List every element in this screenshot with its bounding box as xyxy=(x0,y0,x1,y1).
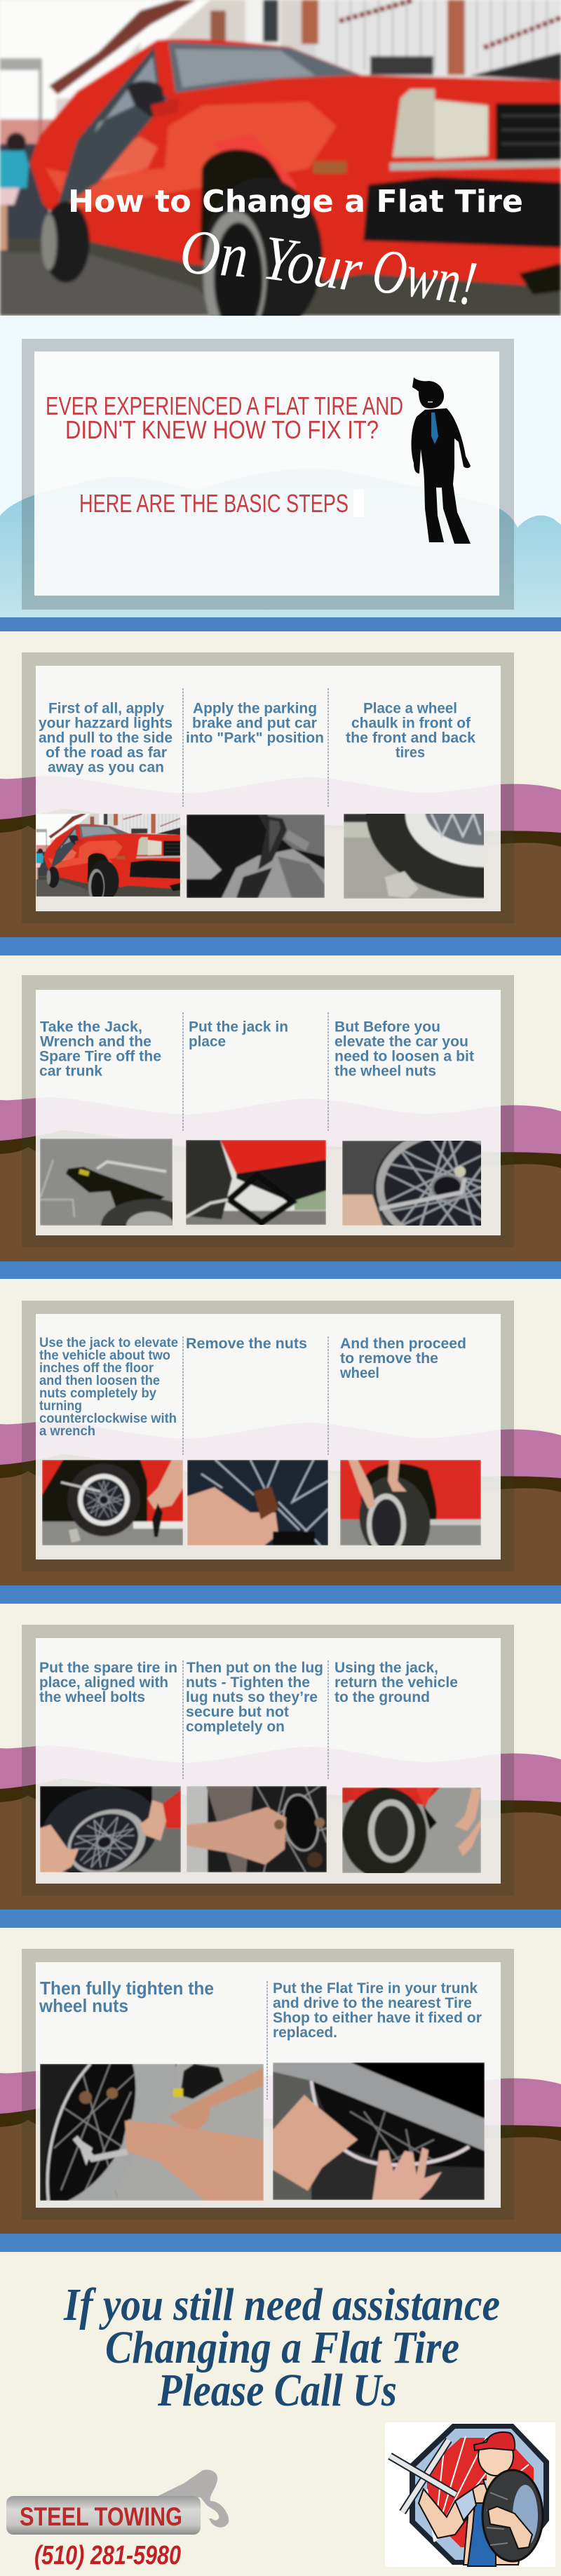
photo: red car xyxy=(36,814,180,897)
landscape hills xyxy=(0,776,561,940)
text: parking brake: brake and put car xyxy=(192,716,317,731)
text: take the jack xyxy=(39,1019,161,1080)
text: return to ground: to the ground xyxy=(334,1689,430,1705)
text: wheel chock: Place a wheel xyxy=(363,700,457,717)
intro steps text: HERE ARE THE BASIC STEPS xyxy=(79,489,349,518)
white card xyxy=(36,666,501,911)
intro panel xyxy=(34,351,499,596)
text: return to ground: Using the jack, xyxy=(334,1660,438,1676)
icon: mechanic with tire and wrench xyxy=(385,2422,555,2567)
call to action text: Changing a Flat Tire xyxy=(105,2322,459,2373)
text: lug nuts: Then put on the lug xyxy=(187,1660,323,1676)
divider band 1 xyxy=(0,617,561,631)
text: remove wheel: to remove the xyxy=(340,1350,438,1367)
text: parking brake: Apply the parking xyxy=(193,700,317,717)
text: fully tighten: Then fully tighten the xyxy=(40,1978,214,1999)
text: elevate vehicle: Use the jack to elevate xyxy=(39,1336,178,1350)
text: remove nuts: Remove the nuts xyxy=(186,1336,307,1352)
photo: lowering the vehicle xyxy=(342,1787,481,1873)
frame xyxy=(22,1625,514,1896)
text: parking brake xyxy=(186,700,324,746)
text: loosen wheel nuts: elevate the car you xyxy=(334,1034,468,1050)
text: lug nuts: nuts - Tighten the xyxy=(186,1675,310,1691)
subtitle: On Your Own! xyxy=(178,217,481,318)
subtitle: On Your Own!: On xyxy=(178,217,250,291)
photo: removing nuts by hand xyxy=(187,1460,328,1545)
intro white marker xyxy=(353,490,364,517)
text: return to ground: return the vehicle xyxy=(334,1675,458,1691)
photo: scissor jack under car xyxy=(186,1140,326,1225)
landscape hills xyxy=(0,1745,561,1910)
text: flat tire to shop: replaced. xyxy=(273,2025,337,2041)
text: loosen wheel nuts xyxy=(334,1019,474,1080)
text: wheel chock: chaulk in front of xyxy=(351,716,471,731)
text: hazard lights: First of all, apply xyxy=(48,700,164,717)
intro question text xyxy=(46,391,403,444)
divider band 2 xyxy=(0,937,561,955)
text: flat tire to shop xyxy=(273,1980,482,2041)
text: put the jack in place xyxy=(189,1019,288,1050)
photo: fitting spare tire xyxy=(40,1786,181,1872)
landscape hills xyxy=(0,1097,561,1261)
text: loosen wheel nuts: the wheel nuts xyxy=(334,1064,436,1080)
white card xyxy=(36,1314,501,1559)
text: hazard lights: away as you can xyxy=(48,759,164,776)
frame xyxy=(22,1301,514,1571)
landscape hills xyxy=(0,1421,561,1585)
text: lug nuts xyxy=(186,1660,323,1735)
white card xyxy=(36,1638,501,1884)
text: spare tire in place: the wheel bolts xyxy=(39,1689,145,1705)
text: hazard lights: your hazzard lights xyxy=(39,716,173,731)
text: take the jack: Wrench and the xyxy=(40,1034,151,1050)
subtitle: On Your Own!: Own! xyxy=(368,236,481,318)
divider band 3 xyxy=(0,1261,561,1279)
text: loosen wheel nuts: But Before you xyxy=(334,1019,440,1035)
photo: loosening wheel nuts xyxy=(342,1141,481,1226)
text: elevate vehicle: counterclockwise with xyxy=(39,1411,177,1426)
photo: car raised on jack xyxy=(42,1460,183,1545)
photo: jack and wrench on ground xyxy=(40,1139,173,1226)
frame xyxy=(22,1949,514,2220)
step panel 1 xyxy=(0,652,561,940)
text: fully tighten: wheel nuts xyxy=(39,1995,128,2016)
call to action text xyxy=(63,2279,500,2416)
text: spare tire in place: Put the spare tire in xyxy=(39,1660,177,1676)
text: spare tire in place xyxy=(39,1660,177,1705)
subtitle: On Your Own!: Your xyxy=(259,223,367,306)
frame xyxy=(22,975,514,1247)
landscape hills xyxy=(0,2070,561,2234)
photo: gear shifter xyxy=(187,814,325,898)
step panel 4 xyxy=(0,1625,561,1910)
text: elevate vehicle: nuts completely by xyxy=(39,1386,156,1401)
text: hazard lights: of the road as far xyxy=(46,745,167,760)
text: parking brake: into "Park" position xyxy=(186,730,324,746)
text: remove wheel xyxy=(339,1336,466,1381)
frame xyxy=(22,652,514,923)
text: return to ground xyxy=(334,1660,458,1705)
text: take the jack: Spare Tire off the xyxy=(39,1049,161,1065)
intro question text: DIDN'T KNEW HOW TO FIX IT? xyxy=(65,415,379,444)
text: elevate vehicle xyxy=(39,1336,178,1439)
divider band 5 xyxy=(0,1910,561,1928)
photo: wheel chock rock xyxy=(344,814,484,899)
text: wheel chock: the front and back xyxy=(346,730,475,746)
hero photo: red car with flat tire xyxy=(0,0,561,316)
logo: Steel Towing: STEEL TOWING xyxy=(20,2502,182,2531)
intro section xyxy=(0,316,561,617)
text: elevate vehicle: a wrench xyxy=(39,1424,95,1439)
text: flat tire to shop: and drive to the nearest Tire xyxy=(273,1995,472,2011)
divider band 4 xyxy=(0,1585,561,1604)
call to action text: Please Call Us xyxy=(157,2365,397,2416)
photo: tightening nuts with wrench xyxy=(40,2064,264,2201)
step panel 3 xyxy=(0,1301,561,1585)
text: flat tire to shop: Shop to either have it fixed or xyxy=(273,2010,482,2026)
photo: fitting lug nuts xyxy=(187,1786,327,1872)
text: wheel chock xyxy=(346,700,475,760)
step panel 2 xyxy=(0,975,561,1261)
text: elevate vehicle: and then loosen the xyxy=(39,1374,160,1388)
white card xyxy=(36,990,501,1235)
text: remove wheel: And then proceed xyxy=(340,1336,466,1352)
text: flat tire to shop: Put the Flat Tire in your trunk xyxy=(273,1980,478,1997)
text: hazard lights xyxy=(39,700,173,776)
text: hazard lights: and pull to the side xyxy=(39,730,173,746)
text: elevate vehicle: the vehicle about two xyxy=(39,1348,170,1363)
text: put the jack in place: place xyxy=(189,1034,226,1050)
white card xyxy=(36,1962,501,2208)
sky clouds xyxy=(0,469,561,617)
title: How to Change a Flat Tire: How to Change a Flat Tire xyxy=(68,184,523,220)
text: lug nuts: secure but not xyxy=(186,1704,289,1720)
intro frame xyxy=(22,339,514,610)
text: put the jack in place: Put the jack in xyxy=(189,1019,288,1035)
text: wheel chock: tires xyxy=(396,745,425,760)
text: elevate vehicle: turning xyxy=(39,1399,82,1414)
photo: pulling off wheel xyxy=(340,1460,481,1545)
text: spare tire in place: place, aligned with xyxy=(39,1675,168,1691)
footer section xyxy=(0,2252,561,2576)
text: remove wheel: wheel xyxy=(339,1365,379,1381)
logo: Steel Towing xyxy=(6,2470,229,2535)
text: elevate vehicle: inches off the floor xyxy=(39,1361,154,1376)
text: lug nuts: lug nuts so they’re xyxy=(186,1689,318,1705)
text: take the jack: Take the Jack, xyxy=(40,1019,142,1035)
text: loosen wheel nuts: need to loosen a bit xyxy=(334,1049,474,1065)
step panel 5 xyxy=(0,1949,561,2234)
call to action text: If you still need assistance xyxy=(63,2279,500,2330)
photo: placing flat tire in trunk xyxy=(273,2062,485,2200)
icon: thinking man in suit xyxy=(412,377,471,544)
intro question text: EVER EXPERIENCED A FLAT TIRE AND xyxy=(46,391,403,420)
text: fully tighten xyxy=(39,1978,214,2016)
divider band 6 xyxy=(0,2234,561,2252)
text: take the jack: car trunk xyxy=(39,1064,102,1080)
text: lug nuts: completely on xyxy=(186,1719,285,1735)
phone number: (510) 281-5980 xyxy=(34,2541,181,2570)
